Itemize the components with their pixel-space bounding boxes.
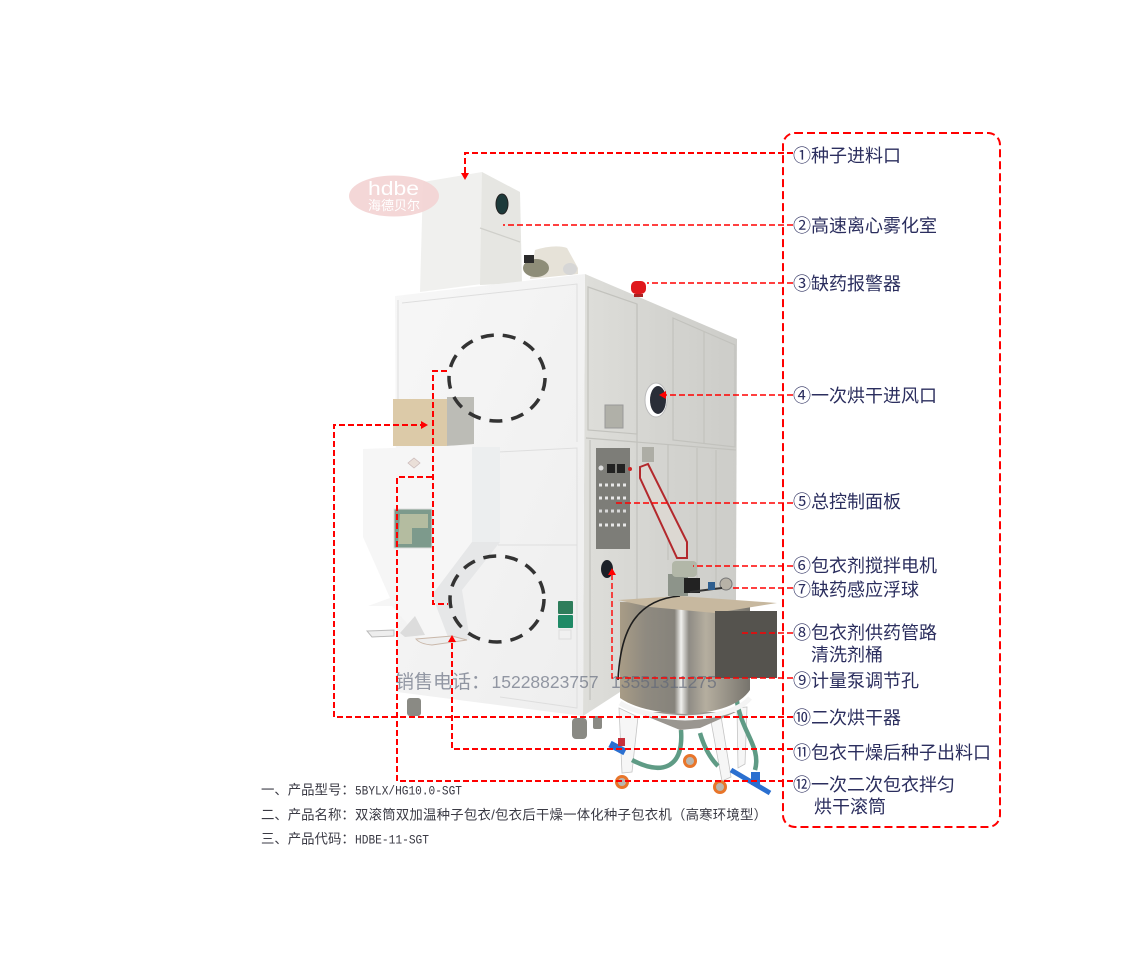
label 12: ⑫ [793, 775, 811, 795]
warning sign [640, 464, 687, 558]
nameplate [605, 405, 623, 428]
alarm beacon [631, 281, 646, 297]
label 12: 一次二次包衣拌匀 [811, 775, 955, 795]
legend labels [793, 146, 991, 817]
label 11: 包衣干燥后种子出料口 [811, 743, 991, 763]
front hopper drum housing [363, 445, 472, 640]
dryer link line [433, 371, 448, 604]
white tank ring [620, 698, 750, 718]
product name: 二、产品名称： [261, 808, 355, 822]
arrow 4 [659, 391, 666, 399]
beige secondary dryer box [393, 399, 447, 446]
float sensor ball [690, 578, 732, 592]
small plate [642, 447, 654, 462]
label 10: ⑩二次烘干器 [793, 708, 901, 728]
orange wheels [616, 756, 726, 792]
leader 12 [397, 477, 793, 781]
main body front face [395, 274, 585, 716]
label 7: ⑦缺药感应浮球 [793, 580, 919, 600]
label 12 second line: 烘干滚筒 [814, 797, 886, 817]
leader 4 [662, 394, 793, 396]
tank body [620, 602, 750, 714]
steel dryer box [447, 397, 474, 446]
tank cone [636, 712, 736, 730]
control panel [596, 448, 632, 549]
leader 6 [693, 565, 793, 567]
power cable [618, 596, 680, 680]
angled duct [432, 542, 500, 640]
label 11: ⑪ [793, 743, 811, 763]
discharge trays [367, 616, 467, 645]
leader 9 [612, 574, 793, 678]
metering pump gauge [601, 560, 613, 578]
window inner tint [398, 514, 428, 544]
product model value: 5BYLX/HG10.0-SGT [355, 784, 462, 798]
upper duct block [472, 447, 500, 542]
green switches [558, 601, 573, 639]
arrow 1 [461, 173, 469, 180]
label 4: ④一次烘干进风口 [793, 386, 937, 406]
product code: 三、产品代码： [261, 832, 355, 846]
label 5: ⑤总控制面板 [793, 492, 901, 512]
label 3: ③缺药报警器 [793, 274, 901, 294]
arrow 10 [421, 421, 428, 429]
leader 3 [647, 282, 793, 284]
product name value: 双滚筒双加温种子包衣/包衣后干燥一体化种子包衣机（高寒环境型） [355, 806, 767, 822]
main body side face [583, 274, 737, 716]
leader 1 [465, 153, 793, 174]
casters [407, 698, 602, 739]
valves [610, 738, 770, 793]
tank legs [619, 707, 747, 781]
arrow 11 [448, 635, 456, 642]
leader 5 [616, 502, 793, 504]
stirring motor [668, 561, 700, 596]
logo: hdbe: hdbe [368, 179, 419, 200]
hopper seam [480, 228, 520, 242]
label 8 second line: 清洗剂桶 [811, 645, 883, 665]
machine: seed coating unit [363, 172, 737, 739]
hopper top front face [420, 172, 482, 292]
product info [261, 782, 767, 848]
green hoses [632, 692, 756, 770]
dashed circle: primary dryer [450, 556, 544, 642]
sales phone watermark: 15228823757 [492, 672, 599, 692]
leader 8 [741, 632, 793, 634]
cleaning agent box [715, 611, 777, 678]
sales phone watermark: 13551311275 [611, 672, 717, 692]
mixing tank assembly [610, 561, 777, 793]
legend frame [783, 133, 1000, 827]
label 6: ⑥包衣剂搅拌电机 [793, 556, 937, 576]
product code value: HDBE-11-SGT [355, 834, 429, 848]
leader 11 [452, 641, 793, 749]
primary drying air inlet [645, 383, 667, 417]
label 2: ②高速离心雾化室 [793, 216, 937, 236]
product model: 一、产品型号： [261, 782, 355, 798]
label 1: ①种子进料口 [793, 146, 901, 166]
label 8: ⑧包衣剂供药管路 [793, 623, 937, 643]
body panel seams [398, 284, 577, 708]
leader lines [334, 153, 793, 781]
side panel seams [586, 287, 736, 700]
view window [394, 509, 432, 548]
leader 10 [334, 425, 793, 717]
blower motor assembly [523, 246, 578, 279]
sales phone watermark: 销售电话： [395, 672, 490, 693]
diamond badge [408, 458, 420, 468]
leader 2 [503, 224, 793, 226]
arrow 9 [608, 568, 616, 575]
hopper side face [480, 172, 522, 285]
logo: hdbe: 海德贝尔 [368, 198, 420, 213]
logo: hdbe [349, 176, 439, 216]
atomizer window [496, 194, 508, 214]
leader 7 [731, 587, 793, 589]
dashed circle: secondary dryer [449, 335, 545, 421]
label 9: ⑨计量泵调节孔 [793, 671, 919, 691]
tank top lid [618, 596, 777, 613]
